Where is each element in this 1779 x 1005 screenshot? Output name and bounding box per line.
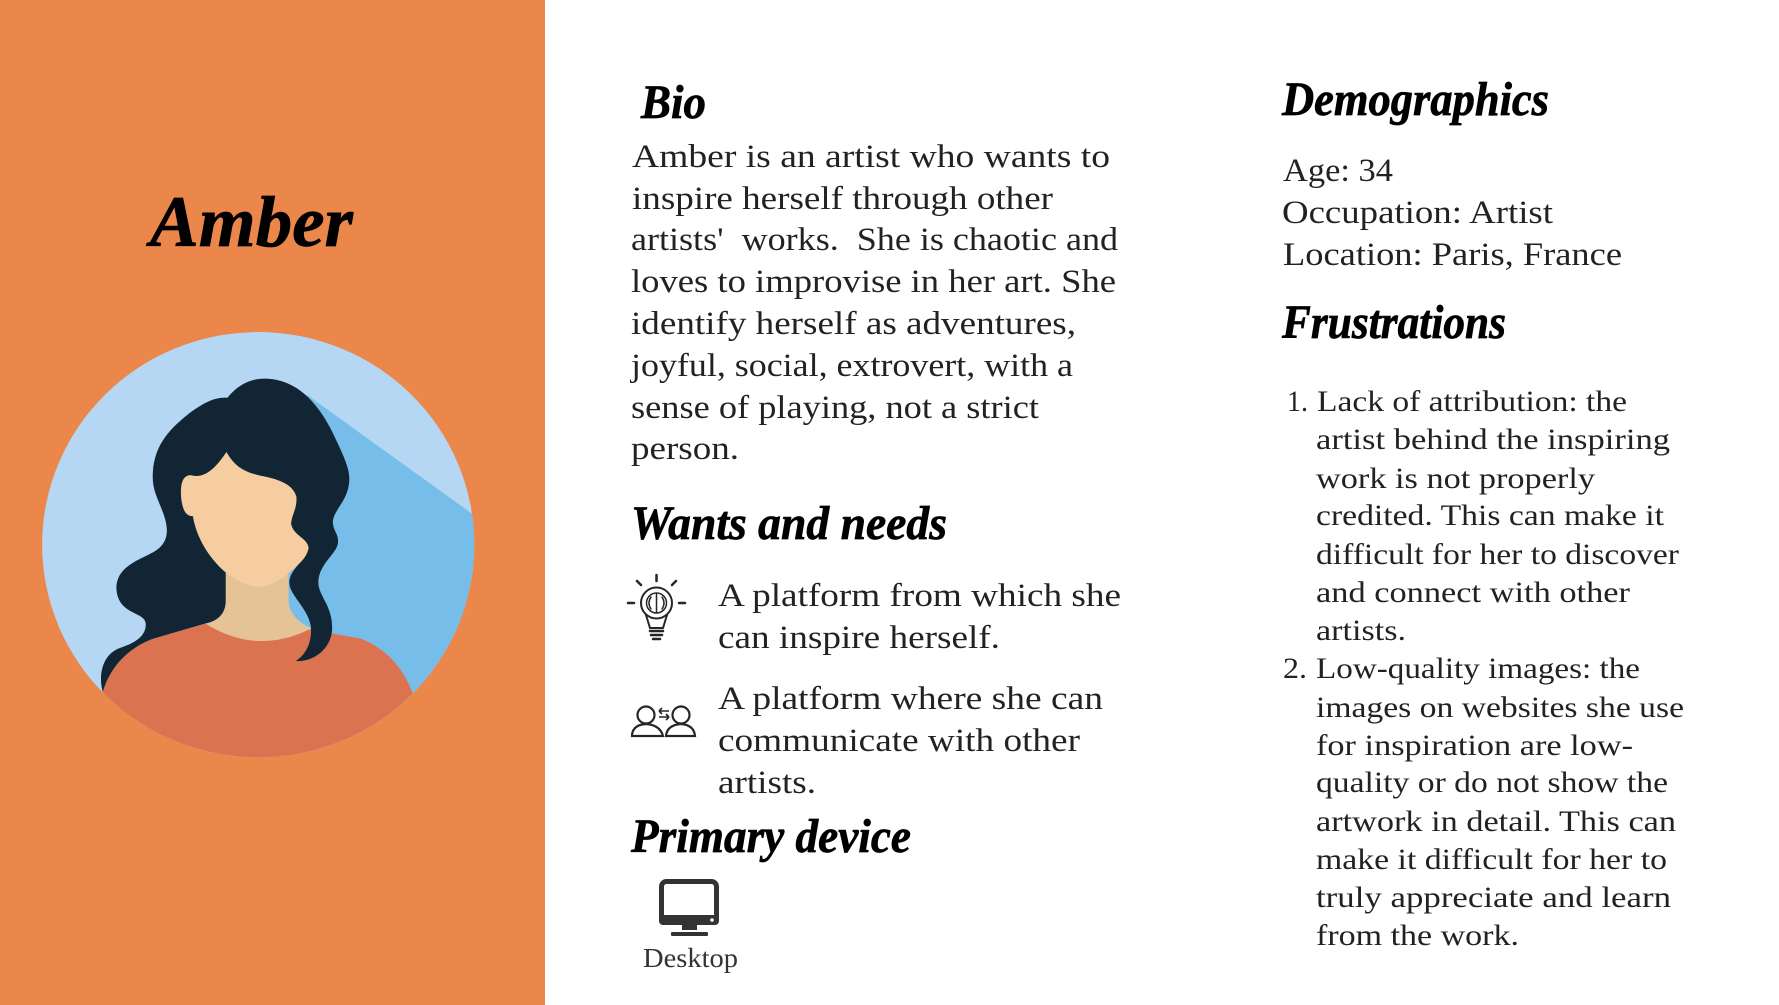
list: frustrations xyxy=(1283,385,1684,952)
list: frustrations: 1. xyxy=(1287,385,1308,418)
text block: bio: artists' works. She is chaotic and xyxy=(631,222,1119,258)
list: frustrations: 2. xyxy=(1283,652,1307,685)
text block: want 2: A platform where she can xyxy=(718,681,1103,717)
text block: demographics: Occupation: Artist xyxy=(1282,195,1553,231)
text block: bio: loves to improvise in her art. She xyxy=(631,264,1116,300)
list: frustrations: difficult for her to discover xyxy=(1316,538,1679,571)
list: frustrations: truly appreciate and learn xyxy=(1316,881,1671,914)
text block: bio: person. xyxy=(631,431,739,467)
text block: want 1: can inspire herself. xyxy=(718,620,1000,656)
label: Desktop: Desktop xyxy=(643,943,738,973)
list: frustrations: artist behind the inspiring xyxy=(1316,423,1670,456)
list: frustrations: artwork in detail. This can xyxy=(1316,805,1676,838)
heading: Wants and needs: Wants and needs xyxy=(631,497,947,550)
list: frustrations: and connect with other xyxy=(1316,576,1630,609)
text block: demographics xyxy=(1282,153,1622,273)
list: frustrations: from the work. xyxy=(1316,919,1519,952)
heading: Bio: Bio xyxy=(640,76,706,129)
text block: bio xyxy=(630,139,1119,467)
text block: demographics: Age: 34 xyxy=(1283,153,1393,189)
list: frustrations: images on websites she use xyxy=(1316,691,1684,724)
text block: bio: inspire herself through other xyxy=(632,181,1053,217)
text block: bio: Amber is an artist who wants to xyxy=(632,139,1110,175)
heading: Primary device: Primary device xyxy=(630,810,911,863)
list: frustrations: credited. This can make it xyxy=(1316,499,1665,532)
heading: Demographics: Demographics xyxy=(1281,73,1549,126)
heading: Frustrations: Frustrations xyxy=(1281,296,1506,349)
text block: bio: identify herself as adventures, xyxy=(631,306,1076,342)
icon: two people exchanging xyxy=(632,706,695,736)
name: Amber: Amber xyxy=(146,182,354,262)
list: frustrations: make it difficult for her to xyxy=(1316,843,1667,876)
icon: lightbulb with brain xyxy=(628,575,685,639)
list: frustrations: quality or do not show the xyxy=(1316,766,1668,799)
text block: bio: sense of playing, not a strict xyxy=(631,390,1039,426)
list: frustrations: Lack of attribution: the xyxy=(1317,385,1627,418)
panel: profile xyxy=(0,0,545,1005)
text block: want 2: artists. xyxy=(718,765,816,801)
text block: want 1 xyxy=(718,578,1121,656)
list: frustrations: for inspiration are low- xyxy=(1316,729,1633,762)
list: frustrations: artists. xyxy=(1316,614,1406,647)
text block: want 2: communicate with other xyxy=(718,723,1080,759)
portrait avatar xyxy=(42,332,474,758)
text block: want 1: A platform from which she xyxy=(718,578,1121,614)
text block: bio: joyful, social, extrovert, with a xyxy=(630,348,1073,384)
text block: demographics: Location: Paris, France xyxy=(1283,237,1622,273)
list: frustrations: Low-quality images: the xyxy=(1316,652,1640,685)
icon: desktop monitor xyxy=(659,882,719,936)
list: frustrations: work is not properly xyxy=(1316,462,1595,495)
text block: want 2 xyxy=(718,681,1103,801)
